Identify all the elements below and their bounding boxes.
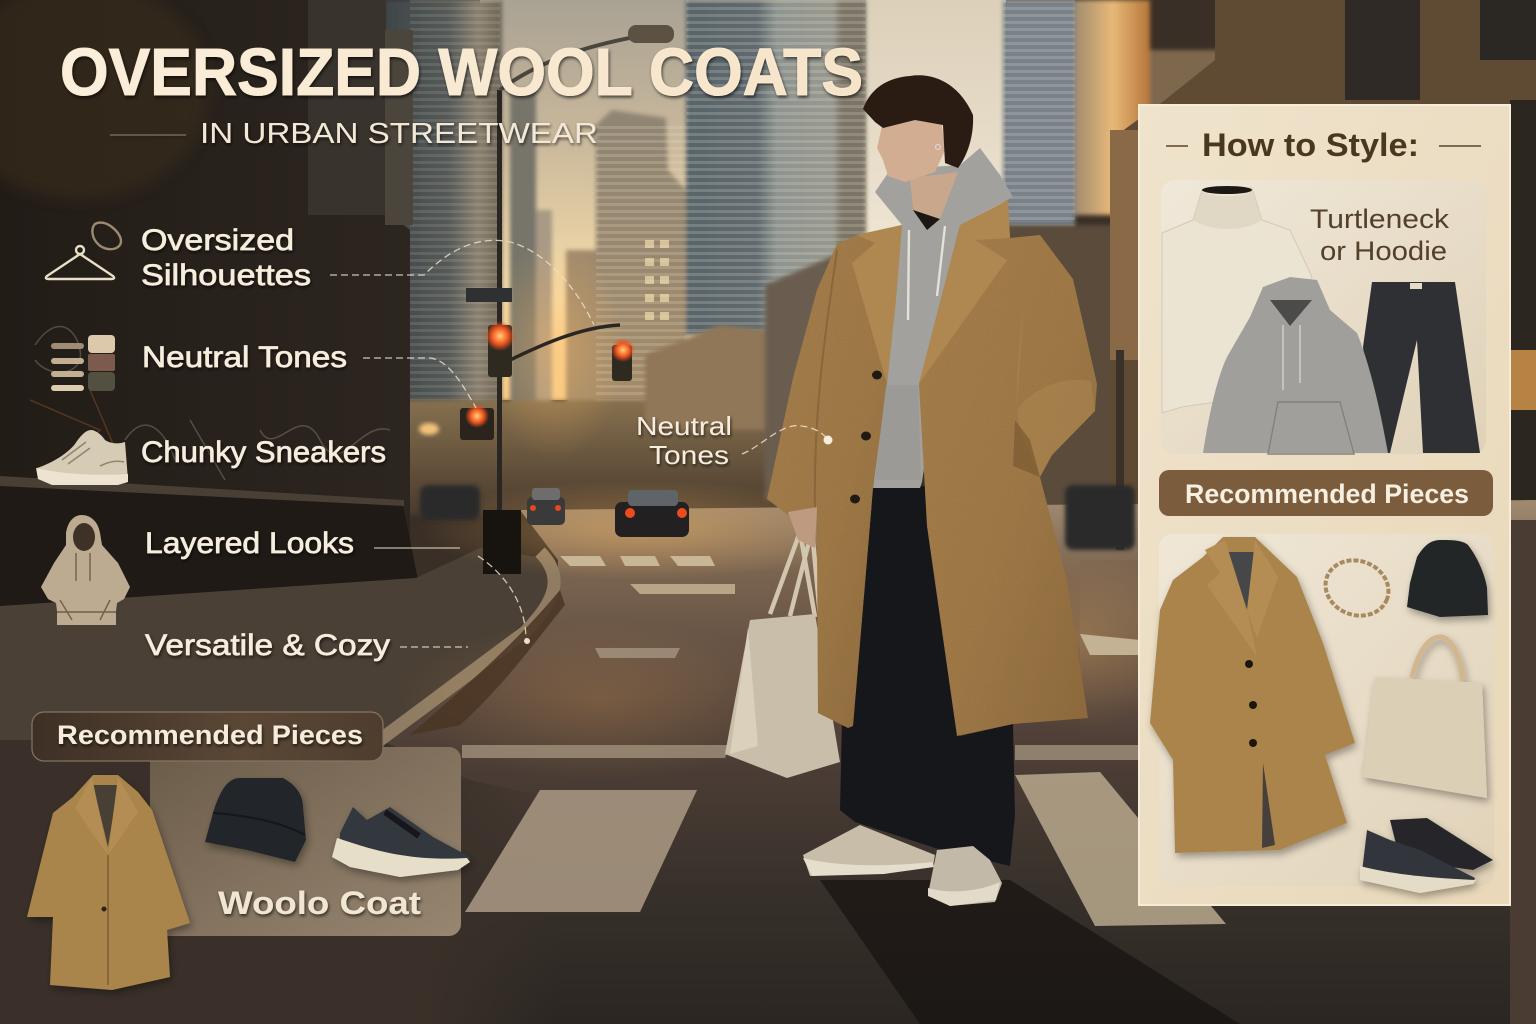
pill: recommended pieces: Recommended Pieces (1185, 479, 1469, 509)
item: dark trousers (1363, 282, 1480, 453)
connector: layered looks (374, 547, 460, 549)
panel: items background (150, 747, 461, 936)
label: chunky sneakers: Chunky Sneakers (141, 436, 386, 469)
pill: recommended pieces (1159, 470, 1493, 516)
curb (380, 552, 554, 740)
left recommended pieces panel (27, 712, 470, 990)
right brick buildings (1110, 0, 1536, 560)
label: oversized: Oversized (141, 224, 294, 257)
shoes (803, 825, 1002, 906)
item: grey hoodie (1203, 277, 1388, 454)
connector: silhouettes (330, 240, 594, 325)
item: tote bag (1363, 637, 1487, 798)
sky (480, 0, 880, 400)
sidewalk (0, 548, 560, 800)
mid-rise buildings and tree line (400, 400, 820, 515)
item: turtleneck sweater (1162, 186, 1312, 413)
item: sneaker (332, 807, 470, 877)
coat buttons (850, 370, 882, 504)
coat lapels (852, 225, 902, 384)
item: coat (1150, 537, 1355, 853)
cars (527, 488, 689, 537)
foliage speckle (0, 0, 210, 200)
title: OVERSIZED WOOL COATS (60, 35, 863, 110)
coat sleeve shading (1017, 300, 1095, 477)
item: sneakers pair (1360, 818, 1493, 893)
feature list (36, 223, 594, 662)
callout: neutral tones on coat (636, 411, 832, 470)
heading: how to style: How to Style: (1202, 127, 1419, 163)
tote bag (725, 530, 840, 778)
leaves on verge (410, 590, 565, 735)
label: versatile and cozy: Versatile & Cozy (145, 629, 390, 662)
subtitle: IN URBAN STREETWEAR (200, 118, 598, 150)
label: silhouettes: Silhouettes (141, 259, 311, 292)
text: turtleneck or hoodie: Turtleneck (1310, 204, 1450, 234)
item: beanie (205, 778, 306, 862)
hoodie (873, 148, 1013, 488)
person in oversized coat (725, 75, 1097, 906)
item: beanie (1407, 540, 1488, 617)
sun glow on road (420, 480, 860, 580)
icon: neutral tones palette (51, 335, 115, 391)
skyscraper floor lines (686, 0, 866, 335)
traffic poles and lights (419, 25, 1124, 574)
distant pedestrians (420, 485, 1135, 550)
connector: versatile and cozy (400, 556, 526, 647)
road (0, 500, 1536, 1024)
distant skyscrapers (385, 0, 1220, 500)
hoodie pocket (875, 385, 921, 480)
trousers (840, 486, 1015, 866)
person shadow (820, 880, 1240, 1024)
railing (0, 476, 418, 606)
label: layered looks: Layered Looks (145, 527, 354, 560)
hand (788, 507, 817, 548)
card: recommended items (1150, 534, 1494, 893)
callout: neutral tones on coat: Neutral (636, 411, 732, 441)
head and hair (863, 75, 973, 182)
item: coat (27, 775, 190, 990)
icon: chunky sneaker (36, 430, 128, 485)
connector: neutral tones (363, 358, 476, 408)
caption: woolo coat: Woolo Coat (218, 885, 421, 921)
left dark wall (0, 0, 410, 610)
item: chain necklace (1318, 552, 1396, 624)
icon: hanger (46, 223, 121, 279)
icon: layered hoodie (41, 515, 130, 625)
left lower asphalt (0, 740, 560, 1024)
bright sky column glow (485, 240, 625, 460)
lit windows (645, 240, 669, 320)
pill: recommended pieces (32, 712, 383, 761)
coat: left front and sleeve (767, 225, 902, 728)
panel: how to style (1139, 105, 1510, 905)
pill: recommended pieces: Recommended Pieces (57, 720, 363, 750)
coat: right front and sleeve (919, 200, 1097, 736)
label: neutral tones: Neutral Tones (142, 341, 347, 374)
card: turtleneck or hoodie (1161, 180, 1486, 454)
crossing bars (462, 556, 1226, 926)
callout: neutral tones on coat: Tones (649, 440, 729, 470)
card: turtleneck or hoodie: or Hoodie (1320, 236, 1447, 266)
